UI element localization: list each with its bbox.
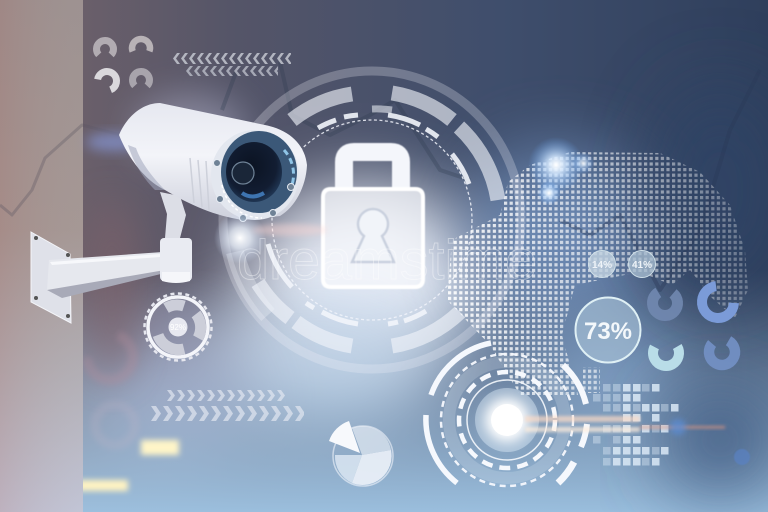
housing — [119, 103, 307, 220]
security camera — [31, 103, 307, 323]
dashed circle — [272, 120, 472, 320]
neck — [160, 192, 186, 238]
lock body — [323, 189, 423, 287]
arm — [47, 252, 165, 298]
lens flares — [214, 137, 750, 465]
joint — [160, 238, 192, 281]
gauge 92% — [144, 294, 212, 360]
14% bubble: 14% — [592, 260, 612, 271]
LEDs — [214, 160, 294, 222]
73% bubble: 73% — [584, 318, 632, 345]
stepped ring details — [235, 109, 392, 315]
pie chart — [329, 421, 393, 486]
small arc icons top left — [93, 36, 153, 92]
lens ring — [211, 130, 299, 220]
donut icons — [647, 285, 740, 371]
percentage bubbles — [576, 250, 656, 362]
chevrons top — [172, 53, 291, 76]
wall — [0, 0, 83, 512]
large ring graphic around padlock — [223, 71, 521, 369]
mounting plate — [31, 232, 71, 323]
thick ring segments — [258, 93, 498, 346]
keyhole — [352, 209, 394, 262]
chevrons bottom — [150, 390, 304, 421]
padlock icon — [323, 152, 423, 287]
world map dots — [440, 150, 755, 400]
inner arcs — [268, 115, 469, 324]
outer translucent ring — [223, 71, 521, 369]
target graphic — [426, 343, 587, 486]
square data grid — [593, 384, 678, 466]
shackle — [344, 152, 401, 188]
blurred background lights — [78, 328, 179, 491]
41% bubble: 41% — [632, 260, 652, 271]
gauge 92%: 92% — [170, 323, 186, 332]
ribs — [190, 158, 209, 210]
watermark: dreamstime — [237, 228, 537, 291]
camera glow — [86, 133, 138, 151]
line chart overlay — [0, 62, 760, 290]
